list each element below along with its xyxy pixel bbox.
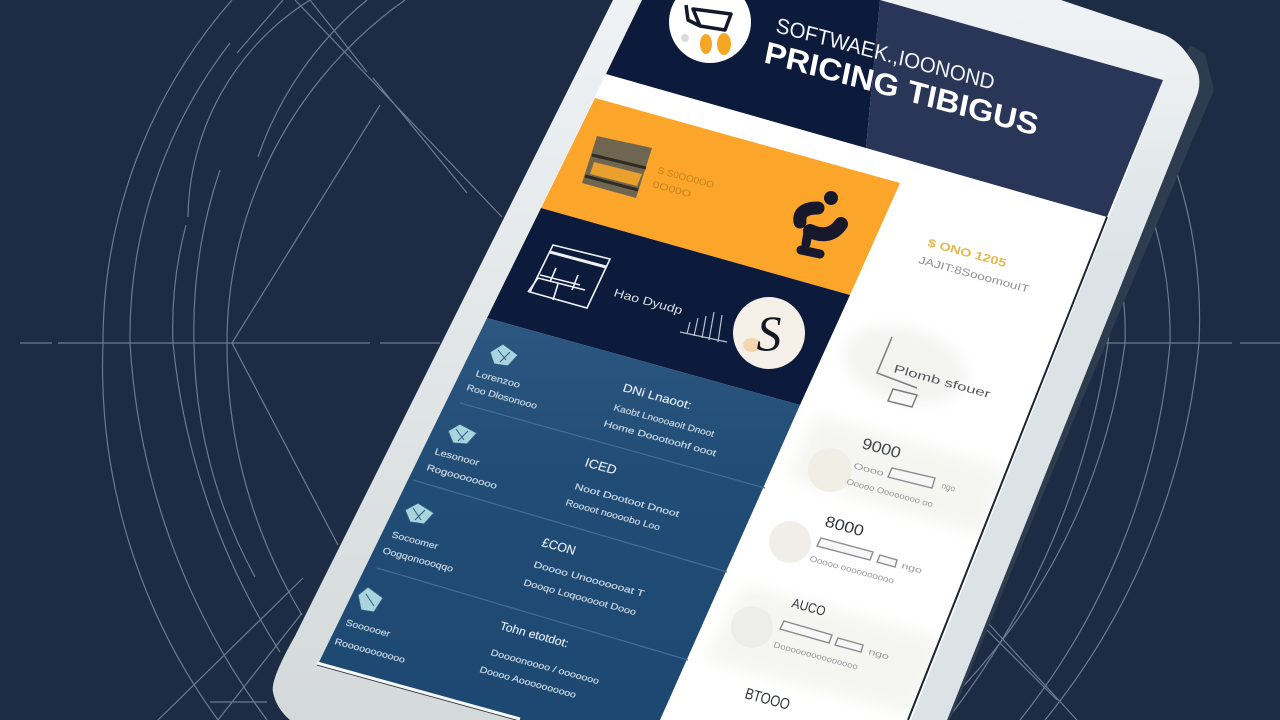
blue panel text: DNi Lnaoot: [621,382,693,412]
orange panel text: 0O00O [651,179,692,199]
blue panel text: Doooonoooo / ooooooo [489,647,601,686]
blue panel text: Oogqonoooqqo [381,545,455,574]
blue panel text: Soooooer [344,617,392,639]
tablet screen [317,0,1163,720]
item: 8000: ngo [900,560,924,575]
icon: brown box [582,136,652,198]
title: PRICING TIBIGUS [762,35,1041,143]
blue panel text: Doooo Unooooooat T [532,559,646,599]
blue panel text: Rogoooooooo [425,462,499,491]
tablet shadow rim [940,45,1214,720]
blue panel text: Noot Dootoot Dnoot [573,481,681,519]
item: BTOOO: BTOOO [743,685,792,714]
blue panel [319,318,800,720]
blue panel text: Tohn etotdot: [498,620,570,650]
item: 9000: 9000 [860,435,903,462]
blue panel text: ICED [583,456,619,477]
icon: wireframe window [528,245,610,308]
blue panel text: Doooo Aoooooooooo [478,664,578,700]
item: AUCO: Dooooooooooooooo [772,639,860,672]
screen white base [319,0,1163,720]
pricing heading [917,237,1031,296]
blue panel text: Dooqo Loqooooot Dooo [522,577,638,617]
header panel [606,0,1163,217]
icon: small bar chart [680,312,727,342]
blue panel text: Lorenzoo [474,368,522,390]
blue panel text [333,368,718,700]
item: AUCO [731,595,891,672]
orange panel text: S S0OO0OO [656,165,715,190]
pricing heading: JAJIT:8SooomouIT [917,255,1031,296]
icon: dark question-mark tool [800,191,841,254]
item: plomb [877,337,992,407]
pricing heading: $ ONO 1205 [926,237,1008,270]
navy panel label: Hao Dyudp [612,287,684,317]
blue panel text: £CON [540,536,578,558]
navy panel [487,208,850,405]
title: SOFTWAEK.,IOONOND [774,13,997,95]
soft gray bands [705,314,1010,715]
item: 8000 [769,513,924,586]
blue panel text: Rooooooooooo [333,636,407,665]
item: 9000: Oooo [852,460,886,478]
item: plomb: Plomb sfouer [892,363,992,401]
right dark edge of screen [908,217,1107,720]
blue panel text: Kaobt Lnoooaoit Dnoot [612,402,716,439]
blue panel text: Socoomer [390,529,440,551]
orange panel [541,98,900,295]
row dividers [377,403,765,660]
item: 9000: ngo [940,480,957,494]
blue panel text: Roooot noooobo Loo [564,497,662,532]
item: 9000 [808,435,957,509]
icons: teal gems [358,344,518,612]
blue panel text: Roo Dlosonooo [465,382,539,411]
blue panel text: Lesonoor [433,446,481,468]
right bezel tint [908,80,1198,720]
blue panel text: Home Doootoohf ooot [602,418,718,458]
icon: dollar circle [733,297,805,369]
item: 9000: Ooooo Oooooooo oo [845,476,935,509]
item: AUCO: ngo [867,646,891,661]
orange panel text [651,165,715,199]
icon: header logo circle [669,0,751,63]
icon: dollar circle: S [756,305,782,361]
item: 8000: Ooooo oooooooooo [808,553,896,586]
right column: price list [705,237,1031,715]
item: AUCO: AUCO [790,595,827,619]
item: 8000: 8000 [823,513,866,540]
tablet body [273,0,1199,720]
bottom white edge of screen [317,663,520,720]
